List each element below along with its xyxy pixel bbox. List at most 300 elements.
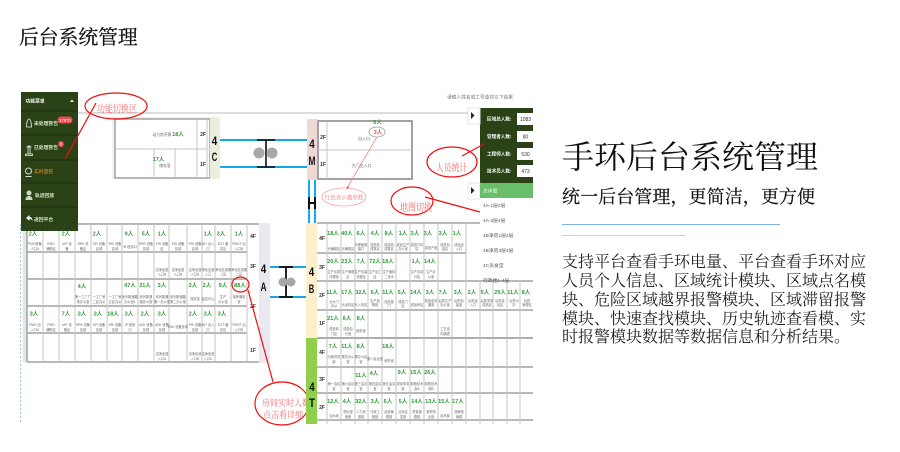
building 4A [20,223,270,424]
room labels: 入口A [158,357,167,361]
room labels: 后勤走 [495,298,506,303]
room labels: 后勤小 [509,298,520,303]
room labels: 发部 [400,414,407,419]
room labels: 部B [428,386,434,391]
room labels: 场办公室 [77,299,89,304]
room labels: 行政工 [370,409,381,414]
room labels: 向通道 [440,331,451,336]
room labels: PMOT 出 [232,322,246,327]
headcounts: 8人 [357,315,366,322]
headcounts: 2人 [189,310,198,318]
room labels: 室 [237,299,241,304]
room labels: PMOT 出 [232,241,246,246]
room labels: 成品部 [384,299,395,304]
body text: 时报警模块数据等数据信息和分析结果。 [562,327,850,346]
room labels: 洁净走道 [156,267,169,272]
headcounts: 7人 [62,310,71,318]
panel: map list [480,183,533,284]
room labels: 第一工厂广 [75,294,91,299]
headcounts: 32人 [355,289,367,296]
room labels: 成品打印 [411,242,423,247]
room labels: 源部 [358,414,365,419]
floor labels: 3F [319,265,325,271]
headcounts: 3人 [158,282,167,289]
room labels: 生产自动 [411,269,423,274]
body text [562,253,866,346]
room labels: 口 [128,328,132,332]
callout: personnel stats [427,144,484,177]
room labels: 生产面料 [383,269,396,274]
room labels: 部 [401,386,405,391]
room labels: 口 [206,328,210,332]
headcounts: 8人 [385,230,394,237]
building 4B: B [309,282,314,296]
headcounts: 2人 [203,282,212,289]
panel: personnel stats: 530 [521,152,530,158]
room labels: 办公室 [398,246,408,251]
callout: function switch area [65,93,147,159]
room labels: 室 [359,359,363,364]
room labels: 区 [160,247,164,251]
room labels: 成品走向 [425,298,437,303]
room labels: 头大门 [329,299,339,304]
headcounts: 29人 [494,289,506,296]
headcounts: 2人 [189,282,198,289]
room labels: 二区 [220,272,227,276]
building 4C: 17人 [153,156,165,163]
divider: short [562,235,685,236]
room labels: 成核区 [370,246,381,251]
building 4M: 4 [309,137,315,151]
room labels: 二流水 [384,274,395,279]
headcounts: 6人 [357,230,366,237]
divider: long [562,224,780,225]
room labels: PMO设备 [28,241,43,246]
room labels: 门 [387,303,391,308]
room labels: 成品检 [370,242,381,247]
menu item: handled alarms: 6 [60,142,63,147]
room labels: 一工厂房 [93,294,105,299]
room labels: 质量管 [412,409,422,414]
menu item: track playback: 轨迹回放 [35,192,54,199]
room labels: 成品科区 [411,302,424,307]
room labels: 部A [414,386,421,391]
headcounts: 11人 [507,289,519,296]
room labels: EOT 缓 [218,322,229,327]
room labels: 室 [332,386,336,391]
room labels: 口 [206,247,210,251]
room labels: 业务区 [398,409,409,414]
headcounts: 14人 [424,258,436,265]
toggle tab: map [468,183,480,199]
floor labels: 3F [250,264,256,270]
headcounts: 3人 [125,310,134,318]
panel: map list: 4B净房1层2层 [483,232,514,239]
room labels: 区域 [192,246,199,251]
building 4B: 4 [309,265,315,279]
room labels: 室 [346,359,350,364]
room labels: 通道 [428,302,435,307]
room labels: 业部 [428,414,435,419]
room labels: 备 [65,246,69,251]
building 4M: 1F [320,162,326,168]
headcounts: 3人 [439,230,448,237]
room labels: 净化走道离 [231,267,247,272]
headcounts: 14人 [410,289,422,296]
callout: room headcount: 点击看详细 [263,409,303,420]
room labels: 入口B [235,247,243,251]
room labels: 分区 [414,274,421,279]
room labels: 制程技术 [425,381,438,386]
menu item: unhandled alarms: 17870 [59,118,71,123]
headcounts: 3人 [371,398,380,405]
screenshot: backend system [20,92,533,425]
room labels: 路办公室 [140,299,152,304]
room labels: 第三会议 [355,381,368,386]
room labels: 流程区 [356,274,367,279]
headcounts: 3人 [30,310,39,318]
headcounts: 26人 [424,369,436,376]
room labels: 入口B [191,357,199,361]
room labels: 头入料区 [355,302,368,307]
room labels: 区域 [96,327,103,332]
room labels: 区域 [80,327,87,332]
body text: 人员个人信息、区域统计模块、区域点名模 [562,271,866,290]
headcounts: 18人 [382,258,394,265]
room labels: 接口 [358,246,364,251]
room labels: 程部 [372,414,379,419]
headcounts: 3人 [204,310,213,318]
body text: 块、危险区域越界报警模块、区域滞留报警 [562,290,866,309]
headcounts: 3人 [411,230,420,237]
building 4M: 5人 [373,119,382,126]
headcounts: 7人 [357,258,366,265]
room labels: 入口 [456,247,462,251]
room labels: PHI 设备 [189,322,202,327]
room labels: RRI 设备 [109,322,122,327]
room labels: PMO [47,242,55,246]
room labels: 生产办 [426,269,437,274]
room labels: 洁净走道 [189,351,202,356]
room labels: 办公 [331,303,338,308]
panel: personnel stats: 区域总人数: [487,116,512,122]
room labels: 理部 [414,414,421,419]
headcounts: 1人 [453,230,462,237]
room labels: 备区 [64,327,71,332]
room labels: PMO 出 [29,322,41,327]
building 4T [306,338,533,424]
room labels: RRK 设备 [76,322,91,327]
floor labels: 1F [250,348,256,354]
room labels: 办公室1 [124,299,136,304]
room labels: 洁净走道 [189,267,202,272]
headcounts: 72人 [369,258,381,265]
headcounts: 8人 [357,343,366,350]
top rule [78,112,468,114]
headcounts: 11人 [355,372,367,379]
panel: map list: 行政楼1-4层 [483,277,509,284]
room labels: 人口A [31,247,40,251]
connector: 4M to 4B [309,180,315,223]
room labels: 生产区制 [328,269,340,274]
headcounts: 4人 [371,230,380,237]
room labels: RRK 设 [78,241,89,246]
headcounts: 2人 [468,289,477,296]
room labels: 包区 [497,302,504,307]
building 4M: 大门出入口 [352,162,372,168]
room labels: SPI 设备 [93,322,106,327]
room labels: 存区 [220,246,227,251]
floor labels: 4F [319,350,325,356]
room labels: 区域 [96,246,103,251]
floor labels: 2F [319,293,325,299]
building 4C: 动力房开票 [153,132,172,137]
building 4C: 18人 [172,131,184,138]
heading: 手环后台系统管理 [562,139,818,175]
headcounts: 47人 [124,282,136,289]
panel: personnel stats: 管理者人数: [487,133,512,140]
callout: room headcount [232,277,310,425]
headcounts: 18人 [382,343,394,350]
room labels: RRR 设备 [139,241,154,246]
room labels: 区域 [143,246,150,251]
room labels: 室 [387,386,391,391]
headcounts: 3人 [218,310,227,318]
floor labels: 4F [319,236,325,242]
room labels: 入口B [191,272,199,276]
room labels: 入口B [235,328,243,332]
headcounts: 2人 [29,230,38,238]
callout: map switch: 地图切换 [400,200,432,214]
body text: 支持平台查看手环电量、平台查看手环对应 [562,253,866,271]
headcounts: 5人 [142,230,151,238]
building 4C [112,117,220,179]
room labels: 部 [332,359,336,364]
building 4M [307,119,412,180]
headcounts: 3人 [426,289,435,296]
room labels: 区 [415,247,419,251]
room labels: PHI 设备 [189,241,202,246]
room labels: 室 [373,386,377,391]
headcounts: 3人 [78,310,87,318]
room labels: 区域 [192,327,199,332]
floor labels [319,350,325,411]
room labels: 入口C [204,357,213,361]
room labels: EOT 缓 [218,241,229,246]
menu item: unhandled alarms [26,116,72,127]
headcounts: 32人 [355,398,367,405]
room labels: 成品区 [482,302,493,307]
headcounts: 12人 [327,398,339,405]
room labels: 维修 [345,414,352,419]
room labels: 装室 [456,302,462,307]
building 4C: 4 [212,134,218,148]
headcounts: 1人 [412,258,421,265]
building 4C: 2F [200,132,206,138]
room labels: 门区 [331,331,338,336]
panel: personnel stats: 1083 [520,117,531,123]
room labels: 后勤包 [454,298,465,303]
room labels: 第五会议 [383,381,396,386]
building 4M: 2F [320,135,326,141]
search hint: 请输入姓名或工号查找以下结果 [447,94,513,100]
headcounts: 9人 [398,369,407,376]
panel: map list: 4C员食堂 [483,262,504,269]
room labels: 五区办公 [109,299,122,304]
callout: map switch [391,187,480,215]
room labels: 办公室 [440,302,450,307]
callout: room headcount: 房间实时人数 [262,397,310,408]
room labels: 采购事 [426,409,437,414]
room labels: 头辅助区 [342,246,355,251]
room labels: 理部 [386,414,393,419]
room labels: 区域 [112,246,119,251]
headcounts: 4人 [370,370,379,377]
headcounts: 1人 [158,230,167,238]
room labels: 运营管 [384,409,394,414]
room labels: 成品产品 [425,245,437,250]
room labels: 二区 [236,272,243,276]
room labels: 洁净走道 [172,267,185,272]
headcounts [327,343,464,405]
room labels: 物业部 [343,409,354,414]
headcounts: 11人 [326,289,338,296]
room labels: 行政财务 [328,354,341,359]
headcounts: 7人 [439,289,448,296]
headcounts: 3人 [454,289,463,296]
room labels: 备区 [80,246,87,251]
menu item: handled alarms [26,141,64,156]
room labels: 工艺走 [440,326,451,331]
room labels: MIT 出入 [202,241,215,246]
room labels: 洁净走道 [156,351,169,356]
headcounts: 5人 [481,289,490,296]
room labels: 二区办公 [93,299,106,304]
headcounts: 88人 [234,282,246,289]
room labels: 入口 [470,303,476,307]
headcounts: 8人 [522,289,531,296]
room labels: 成品走 [454,242,465,247]
room labels: KSK 设备区域 [168,324,189,329]
headcounts: 2人 [62,230,71,238]
room labels: 头走料区 [342,302,355,307]
room labels: 生产 [220,294,226,299]
headcounts: 13人 [425,398,437,405]
room labels: 头等舱候 [355,242,368,247]
headcounts: 21人 [327,315,339,322]
room labels: 生产品 [370,298,380,303]
floor labels: 1F [319,321,325,327]
room labels: 董总办公 [342,354,355,359]
menu item: live monitor: 实时监控 [34,168,53,175]
room labels: 区域 [143,327,150,332]
subheading: 统一后台管理，更简洁，更方便 [562,187,815,207]
floor labels: 2F [250,304,256,310]
headcounts [29,230,246,318]
room labels: 第二办公室 [170,299,186,304]
room labels: 系列新通路 [122,294,139,299]
room labels: 成品包 [343,326,354,331]
menu item: unhandled alarms: 未处理警告 [34,120,58,127]
panel: map list: 4A-3层4层 [483,218,506,224]
headcounts: 3人 [158,310,167,318]
headcounts: 6人 [371,289,380,296]
headcounts: 3人 [217,230,226,238]
room labels: 董八会议室 [367,356,383,361]
building 4M: 出入口 [358,135,370,141]
headcounts: 11人 [341,343,353,350]
room labels: 董办公区 [355,354,368,359]
room labels: 生产加工 [369,269,382,274]
room labels [328,242,533,336]
room labels: 第六会议 [342,381,355,386]
room labels: 办 [512,302,516,307]
room labels: 换班 [372,302,379,307]
headcounts: 1人 [399,230,408,237]
building 4A: A [260,280,267,294]
room labels: 计室 [345,331,351,336]
room labels: 区 [401,304,405,308]
building 4M: M [308,154,316,168]
room labels: 室 [359,386,363,391]
room labels: 资料室 [384,358,394,363]
room labels: 后勤事务 [481,298,494,303]
room labels: 成核区 [384,246,395,251]
floor labels: 4F [250,234,256,240]
room labels: 销部 [456,414,463,419]
headcounts: 23人 [341,258,353,265]
white crop below screenshot [0,426,540,452]
headcounts: 31人 [139,282,151,289]
callout: red means over limit: 红色表示越界数 [325,194,364,202]
headcounts: 17人 [452,398,464,405]
building 4T: 4 [309,380,315,394]
room labels: 保安室 [190,296,200,301]
floor labels [319,236,325,327]
room labels: RRI 设备 [109,241,122,246]
room labels: 成品门 [398,299,408,304]
headcounts: 7人 [329,343,338,350]
headcounts: 20人 [327,258,339,265]
room labels: ASK 设备 [139,322,154,327]
room labels: 存区 [220,327,227,332]
headcounts: 6人 [384,398,393,405]
room labels: 保养通道 [233,294,246,299]
room labels: 公室 [428,274,434,279]
room labels: SPI 设备 [93,241,106,246]
callout: function switch area: 功能切换区 [97,103,137,115]
building 4T: T [309,396,316,410]
floor labels: 3F [319,377,325,383]
room labels: 成品前 [329,326,340,331]
headcounts: 1人 [235,230,244,238]
room labels: 区域 [175,246,182,251]
room labels: MIT 设 [62,322,73,327]
room labels: 技术部 [440,413,451,418]
room labels: 洁水间 [329,413,339,418]
room labels: KSI 设备 [172,241,185,246]
room labels: 区域 [112,327,119,332]
headcounts: 4人 [78,283,87,290]
headcounts: 1人 [204,230,213,238]
headcounts: 6人 [343,315,352,322]
headcounts [326,230,531,322]
headcounts: 40人 [341,230,353,237]
room labels: 第一会议 [328,381,341,386]
room labels [328,354,464,419]
panel: personnel stats: 473 [521,169,530,175]
room labels: 区域 [159,327,166,332]
